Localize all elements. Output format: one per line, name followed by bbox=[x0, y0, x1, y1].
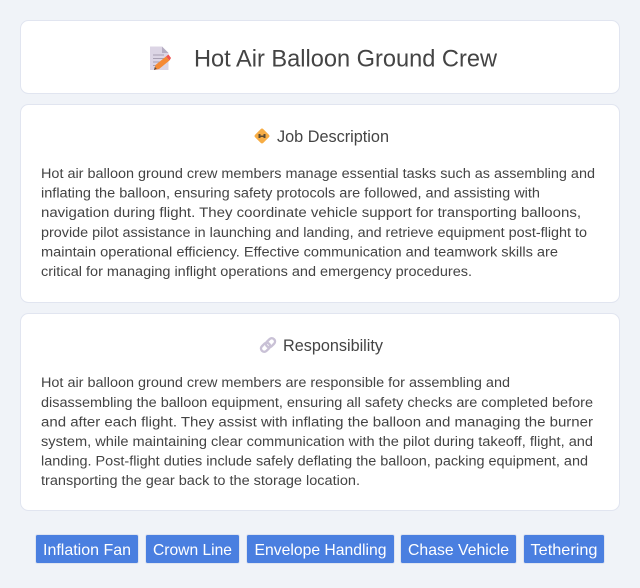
tag: chase vehicle bbox=[400, 534, 516, 564]
tag: crown line: Crown Line bbox=[153, 542, 232, 559]
tag: chase vehicle: Chase Vehicle bbox=[408, 542, 509, 559]
tag: tethering bbox=[524, 534, 604, 564]
panel: responsibility bbox=[20, 314, 620, 510]
text block: job description: provide pilot assistance in launching and landing, and retrieve equipment post-flight to bbox=[41, 225, 587, 241]
text block: responsibility: Hot air balloon ground crew members are responsible for assembling and bbox=[41, 375, 510, 391]
icon: chain link bbox=[260, 337, 276, 353]
text block: responsibility bbox=[41, 375, 593, 489]
heading: job description bbox=[254, 128, 389, 146]
icon: document with pencil bbox=[150, 46, 171, 70]
text block: responsibility: system, while maintaining clear communication with the pilot during takeoff, flight, and bbox=[41, 434, 593, 450]
tag: crown line bbox=[146, 534, 240, 564]
text block: responsibility: and after each flight. They assist with inflating the balloon and managing the burner bbox=[41, 414, 593, 430]
tag: inflation fan: Inflation Fan bbox=[43, 542, 131, 559]
tags row bbox=[36, 534, 604, 564]
heading text: Responsibility bbox=[283, 337, 384, 355]
text block: job description: critical for managing inflight operations and emergency procedures. bbox=[41, 264, 472, 280]
text block: responsibility: landing. Post-flight duties include safely deflating the balloon, packing equipment, and bbox=[41, 454, 588, 470]
text block: responsibility: transporting the gear back to the storage location. bbox=[41, 473, 360, 489]
text block: job description bbox=[41, 166, 595, 280]
tag: envelope handling bbox=[246, 534, 394, 564]
text block: job description: maintain operational efficiency. Effective communication and teamwork skills are bbox=[41, 244, 558, 260]
panel: job description bbox=[20, 104, 620, 302]
heading: responsibility bbox=[260, 337, 384, 355]
title: Hot Air Balloon Ground Crew bbox=[194, 46, 498, 72]
text block: responsibility: disassembling the balloon equipment, ensuring all safety checks are completed before bbox=[41, 395, 593, 411]
text block: job description: Hot air balloon ground crew members manage essential tasks such as assembling and bbox=[41, 166, 595, 182]
heading text: Job Description bbox=[277, 128, 389, 146]
tag: inflation fan bbox=[36, 534, 138, 564]
text block: job description: navigation during flight. They coordinate vehicle support for transporting balloons, bbox=[41, 205, 581, 221]
tag: envelope handling: Envelope Handling bbox=[254, 542, 386, 559]
title panel bbox=[20, 20, 620, 94]
tag: tethering: Tethering bbox=[530, 542, 598, 559]
text block: job description: inflating the balloon, ensuring safety protocols are followed, and assisting with bbox=[41, 186, 540, 202]
icon: diamond sign bbox=[254, 128, 270, 144]
